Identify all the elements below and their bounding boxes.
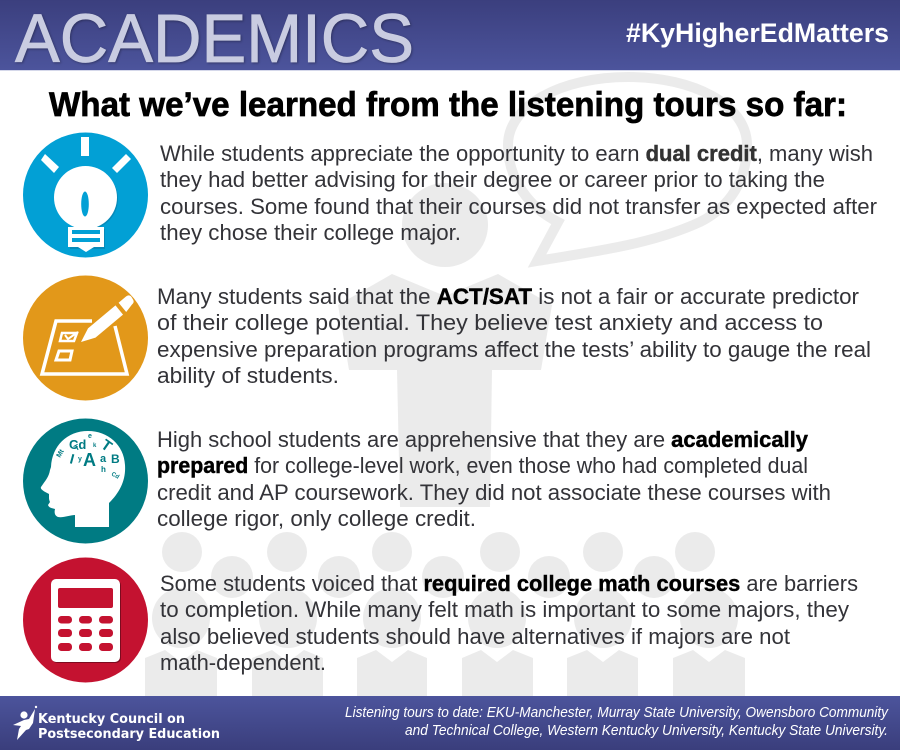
background illustration: speaker and crowd [145, 77, 747, 696]
icon: head with letters: A [83, 450, 96, 470]
icon: head with letters: Cd [69, 437, 86, 452]
header title: ACADEMICS [15, 0, 414, 77]
panel: dual credit [23, 132, 877, 258]
panel: college math [23, 558, 858, 682]
icon: head with letters: k [93, 443, 97, 449]
text: college math: to completion. While many felt math is important to some majors, they [160, 597, 850, 622]
text: college math [160, 571, 858, 675]
icon: head with letters: a [100, 453, 107, 465]
icon: head with letters: T [72, 442, 81, 453]
icon: head with letters: h [101, 465, 106, 474]
text: dual credit: courses. Some found that their courses did not transfer as expected after [160, 194, 877, 219]
text: dual credit: they chose their college major. [160, 220, 461, 245]
icon: head with letters: B [111, 452, 120, 466]
icon: head with letters: y [78, 456, 82, 463]
logo wordmark: Postsecondary Education [38, 726, 220, 742]
text: ACT/SAT: Many students said that the ACT/SAT is not a fair or accurate predictor [157, 284, 859, 309]
text: dual credit: they had better advising for their degree or career prior to taking the [160, 167, 825, 192]
text: academically prepared [157, 427, 831, 531]
listening tours note [345, 704, 889, 739]
crowd of students [145, 532, 745, 696]
hashtag: #KyHigherEdMatters [626, 18, 889, 48]
icon: calculator [23, 558, 148, 682]
logo: Kentucky Council on Postsecondary Education [13, 706, 220, 742]
text: college math: Some students voiced that required college math courses are barriers [160, 571, 858, 596]
logo wordmark [38, 711, 220, 742]
text: ACT/SAT: of their college potential. They believe test anxiety and access to [157, 310, 823, 335]
text: ACT/SAT: ability of students. [157, 363, 339, 388]
text: academically prepared: prepared for college-level work, even those who had completed dual [157, 453, 808, 478]
header band [0, 0, 900, 77]
speaker figure [338, 183, 552, 507]
icon: head with letters: T [98, 436, 115, 456]
text: college math: math-dependent. [160, 650, 326, 675]
text: ACT/SAT [157, 284, 871, 388]
text: dual credit: While students appreciate the opportunity to earn dual credit, many wish [160, 141, 873, 166]
text: dual credit [160, 141, 877, 245]
icon: head with letters: e [88, 433, 92, 440]
icon: head with letters: I [68, 450, 76, 467]
icon: head with letters [23, 418, 148, 544]
panel: academically prepared [23, 418, 831, 544]
icon: light bulb [23, 132, 148, 258]
icon: test paper and pencil [23, 276, 148, 400]
text: college math: also believed students should have alternatives if majors are not [160, 624, 791, 649]
footer band [0, 696, 900, 750]
text: academically prepared: High school students are apprehensive that they are academically [157, 427, 808, 452]
text: ACT/SAT: expensive preparation programs affect the tests’ ability to gauge the real [157, 337, 871, 362]
icon: running figure [13, 706, 37, 740]
panel: ACT/SAT [23, 276, 871, 400]
icon: head with letters: Cd [110, 472, 120, 481]
speech bubble [508, 77, 747, 261]
text: academically prepared: college rigor, only college credit. [157, 506, 476, 531]
icon: head with letters: Mt [56, 448, 66, 459]
text: academically prepared: credit and AP coursework. They did not associate these courses with [157, 480, 831, 505]
logo wordmark: Kentucky Council on [38, 711, 185, 727]
main heading: What we’ve learned from the listening tours so far: [49, 86, 847, 124]
